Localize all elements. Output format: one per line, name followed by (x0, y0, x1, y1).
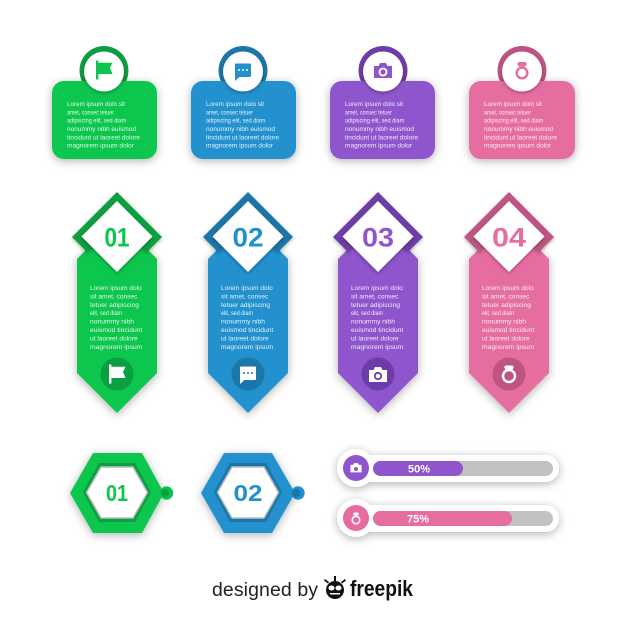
diamond number 02 (212, 201, 284, 272)
arrow text: tetuer adipiscing (482, 302, 531, 309)
arrow text: Lorem ipsum dolo (221, 285, 273, 292)
arrow text: euismod tincidunt (221, 327, 274, 334)
connector knob (160, 486, 173, 500)
diamond frame (72, 192, 162, 252)
card text: tincidunt ut laoreet dolore (206, 134, 280, 141)
hexagon badge 01 (70, 453, 173, 533)
arrow text: elit, sed diam (90, 310, 122, 317)
diamond frame (333, 192, 423, 252)
arrow text: Lorem ipsum dolo (351, 285, 403, 292)
arrow text: magnorem ipsum (221, 344, 273, 351)
arrow text: ut laoreet dolore (221, 335, 269, 342)
icon: flag (100, 358, 134, 390)
panel: green text card (52, 46, 157, 159)
inner ring (83, 463, 151, 522)
card text: amet, consec tetuer (67, 109, 114, 116)
card text: nonummy nibh euismod (206, 126, 275, 133)
number: 02 (234, 480, 262, 506)
arrow text: Lorem ipsum dolo (482, 285, 534, 292)
arrow text: elit, sed diam (482, 310, 514, 317)
card text: magnorem ipsum dolor (67, 143, 134, 150)
badge ring (80, 46, 128, 95)
arrow text (90, 285, 143, 351)
arrow text: sit amet, consec (351, 293, 398, 300)
value: 50% (408, 464, 430, 476)
card text: tincidunt ut laoreet dolore (67, 134, 141, 141)
arrow body (338, 219, 418, 413)
diamond number 03 (342, 201, 414, 272)
arrow text: Lorem ipsum dolo (90, 285, 142, 292)
card body (52, 81, 157, 159)
card text: nonummy nibh euismod (67, 126, 136, 133)
arrow body (208, 219, 288, 413)
card text (484, 101, 558, 150)
arrow text: tetuer adipiscing (351, 302, 400, 309)
outer hexagon (70, 453, 164, 533)
arrow text: elit, sed diam (221, 310, 253, 317)
value: 75% (407, 514, 429, 526)
icon: ring (492, 358, 526, 390)
track (373, 461, 553, 476)
icon badge: ring (502, 52, 542, 92)
card body (191, 81, 296, 159)
card text: amet, consec tetuer (345, 109, 392, 116)
card text: amet, consec tetuer (206, 109, 253, 116)
card text: tincidunt ut laoreet dolore (345, 134, 419, 141)
icon: camera (343, 455, 369, 481)
hexagon badge 02 (201, 453, 305, 533)
arrow text: euismod tincidunt (90, 327, 143, 334)
card text: nonummy nibh euismod (484, 126, 553, 133)
icon: camera (362, 358, 394, 390)
panel: pink arrow 04 (464, 192, 554, 413)
arrow text: sit amet, consec (221, 293, 268, 300)
progress bar 50% (337, 449, 559, 487)
track (373, 511, 553, 526)
card text: Lorem ipsum dolo sit (345, 101, 403, 108)
arrow text: nonummy nibh (221, 319, 265, 326)
icon: freepik logo (324, 576, 346, 599)
card text: adipiscing elit, sed diam (484, 118, 543, 125)
arrow text: sit amet, consec (482, 293, 529, 300)
card text (67, 101, 141, 150)
arrow text (351, 285, 404, 351)
card text: nonummy nibh euismod (345, 126, 414, 133)
card text: magnorem ipsum dolor (484, 143, 551, 150)
diamond number 02: 02 (232, 222, 264, 252)
card text: tincidunt ut laoreet dolore (484, 134, 558, 141)
bar shell (337, 449, 559, 487)
diamond frame (203, 192, 293, 252)
diamond frame (464, 192, 554, 252)
panel: blue text card (191, 46, 296, 159)
icon badge: chat (223, 52, 263, 92)
white hexagon (86, 467, 148, 518)
number: 01 (106, 480, 128, 506)
arrow text: nonummy nibh (482, 319, 526, 326)
arrow text: ut laoreet dolore (351, 335, 399, 342)
icon: ring (343, 505, 369, 531)
icon: chat (232, 358, 264, 390)
arrow text (221, 285, 274, 351)
card text: Lorem ipsum dolo sit (484, 101, 542, 108)
card text: adipiscing elit, sed diam (67, 118, 126, 125)
arrow text: tetuer adipiscing (221, 302, 270, 309)
badge ring (358, 46, 408, 95)
connector knob (291, 486, 305, 500)
diamond number 04: 04 (492, 222, 526, 252)
card text: magnorem ipsum dolor (345, 143, 412, 150)
diamond number 01 (82, 201, 152, 272)
outer hexagon (201, 453, 295, 533)
icon badge: camera (363, 52, 403, 92)
white hexagon (218, 467, 278, 518)
arrow text: euismod tincidunt (351, 327, 404, 334)
arrow text: euismod tincidunt (482, 327, 535, 334)
card text: Lorem ipsum dolo sit (67, 101, 125, 108)
arrow text: nonummy nibh (351, 319, 395, 326)
arrow text: magnorem ipsum (351, 344, 403, 351)
arrow body (77, 219, 157, 413)
designed by: designed by (212, 579, 318, 601)
arrow body (469, 219, 549, 413)
arrow text: ut laoreet dolore (90, 335, 138, 342)
arrow text: ut laoreet dolore (482, 335, 530, 342)
card text: magnorem ipsum dolor (206, 143, 273, 150)
icon badge: flag (84, 52, 124, 92)
inner ring (214, 463, 282, 522)
fill (373, 461, 463, 476)
diamond number 03: 03 (362, 222, 394, 252)
arrow text: tetuer adipiscing (90, 302, 139, 309)
arrow text: magnorem ipsum (482, 344, 534, 351)
fill (373, 511, 512, 526)
arrow text: sit amet, consec (90, 293, 137, 300)
card body (330, 81, 435, 159)
diamond number 01: 01 (104, 222, 130, 252)
card text (345, 101, 419, 150)
panel: purple arrow 03 (333, 192, 423, 413)
card text: adipiscing elit, sed diam (345, 118, 404, 125)
panel: green arrow 01 (72, 192, 162, 413)
badge ring (498, 46, 546, 95)
panel: blue arrow 02 (203, 192, 293, 413)
card text: adipiscing elit, sed diam (206, 118, 265, 125)
panel: purple text card (330, 46, 435, 159)
arrow text: magnorem ipsum (90, 344, 142, 351)
card text (206, 101, 280, 150)
arrow text (482, 285, 535, 351)
panel: pink text card (469, 46, 575, 159)
arrow text: nonummy nibh (90, 319, 134, 326)
card body (469, 81, 575, 159)
card text: amet, consec tetuer (484, 109, 531, 116)
arrow text: elit, sed diam (351, 310, 383, 317)
progress bar 75% (337, 499, 559, 537)
card text: Lorem ipsum dolo sit (206, 101, 264, 108)
diamond number 04 (474, 201, 544, 272)
footer credit (212, 576, 414, 601)
freepik: freepik (350, 576, 414, 601)
bar shell (337, 499, 559, 537)
badge ring (218, 46, 268, 95)
